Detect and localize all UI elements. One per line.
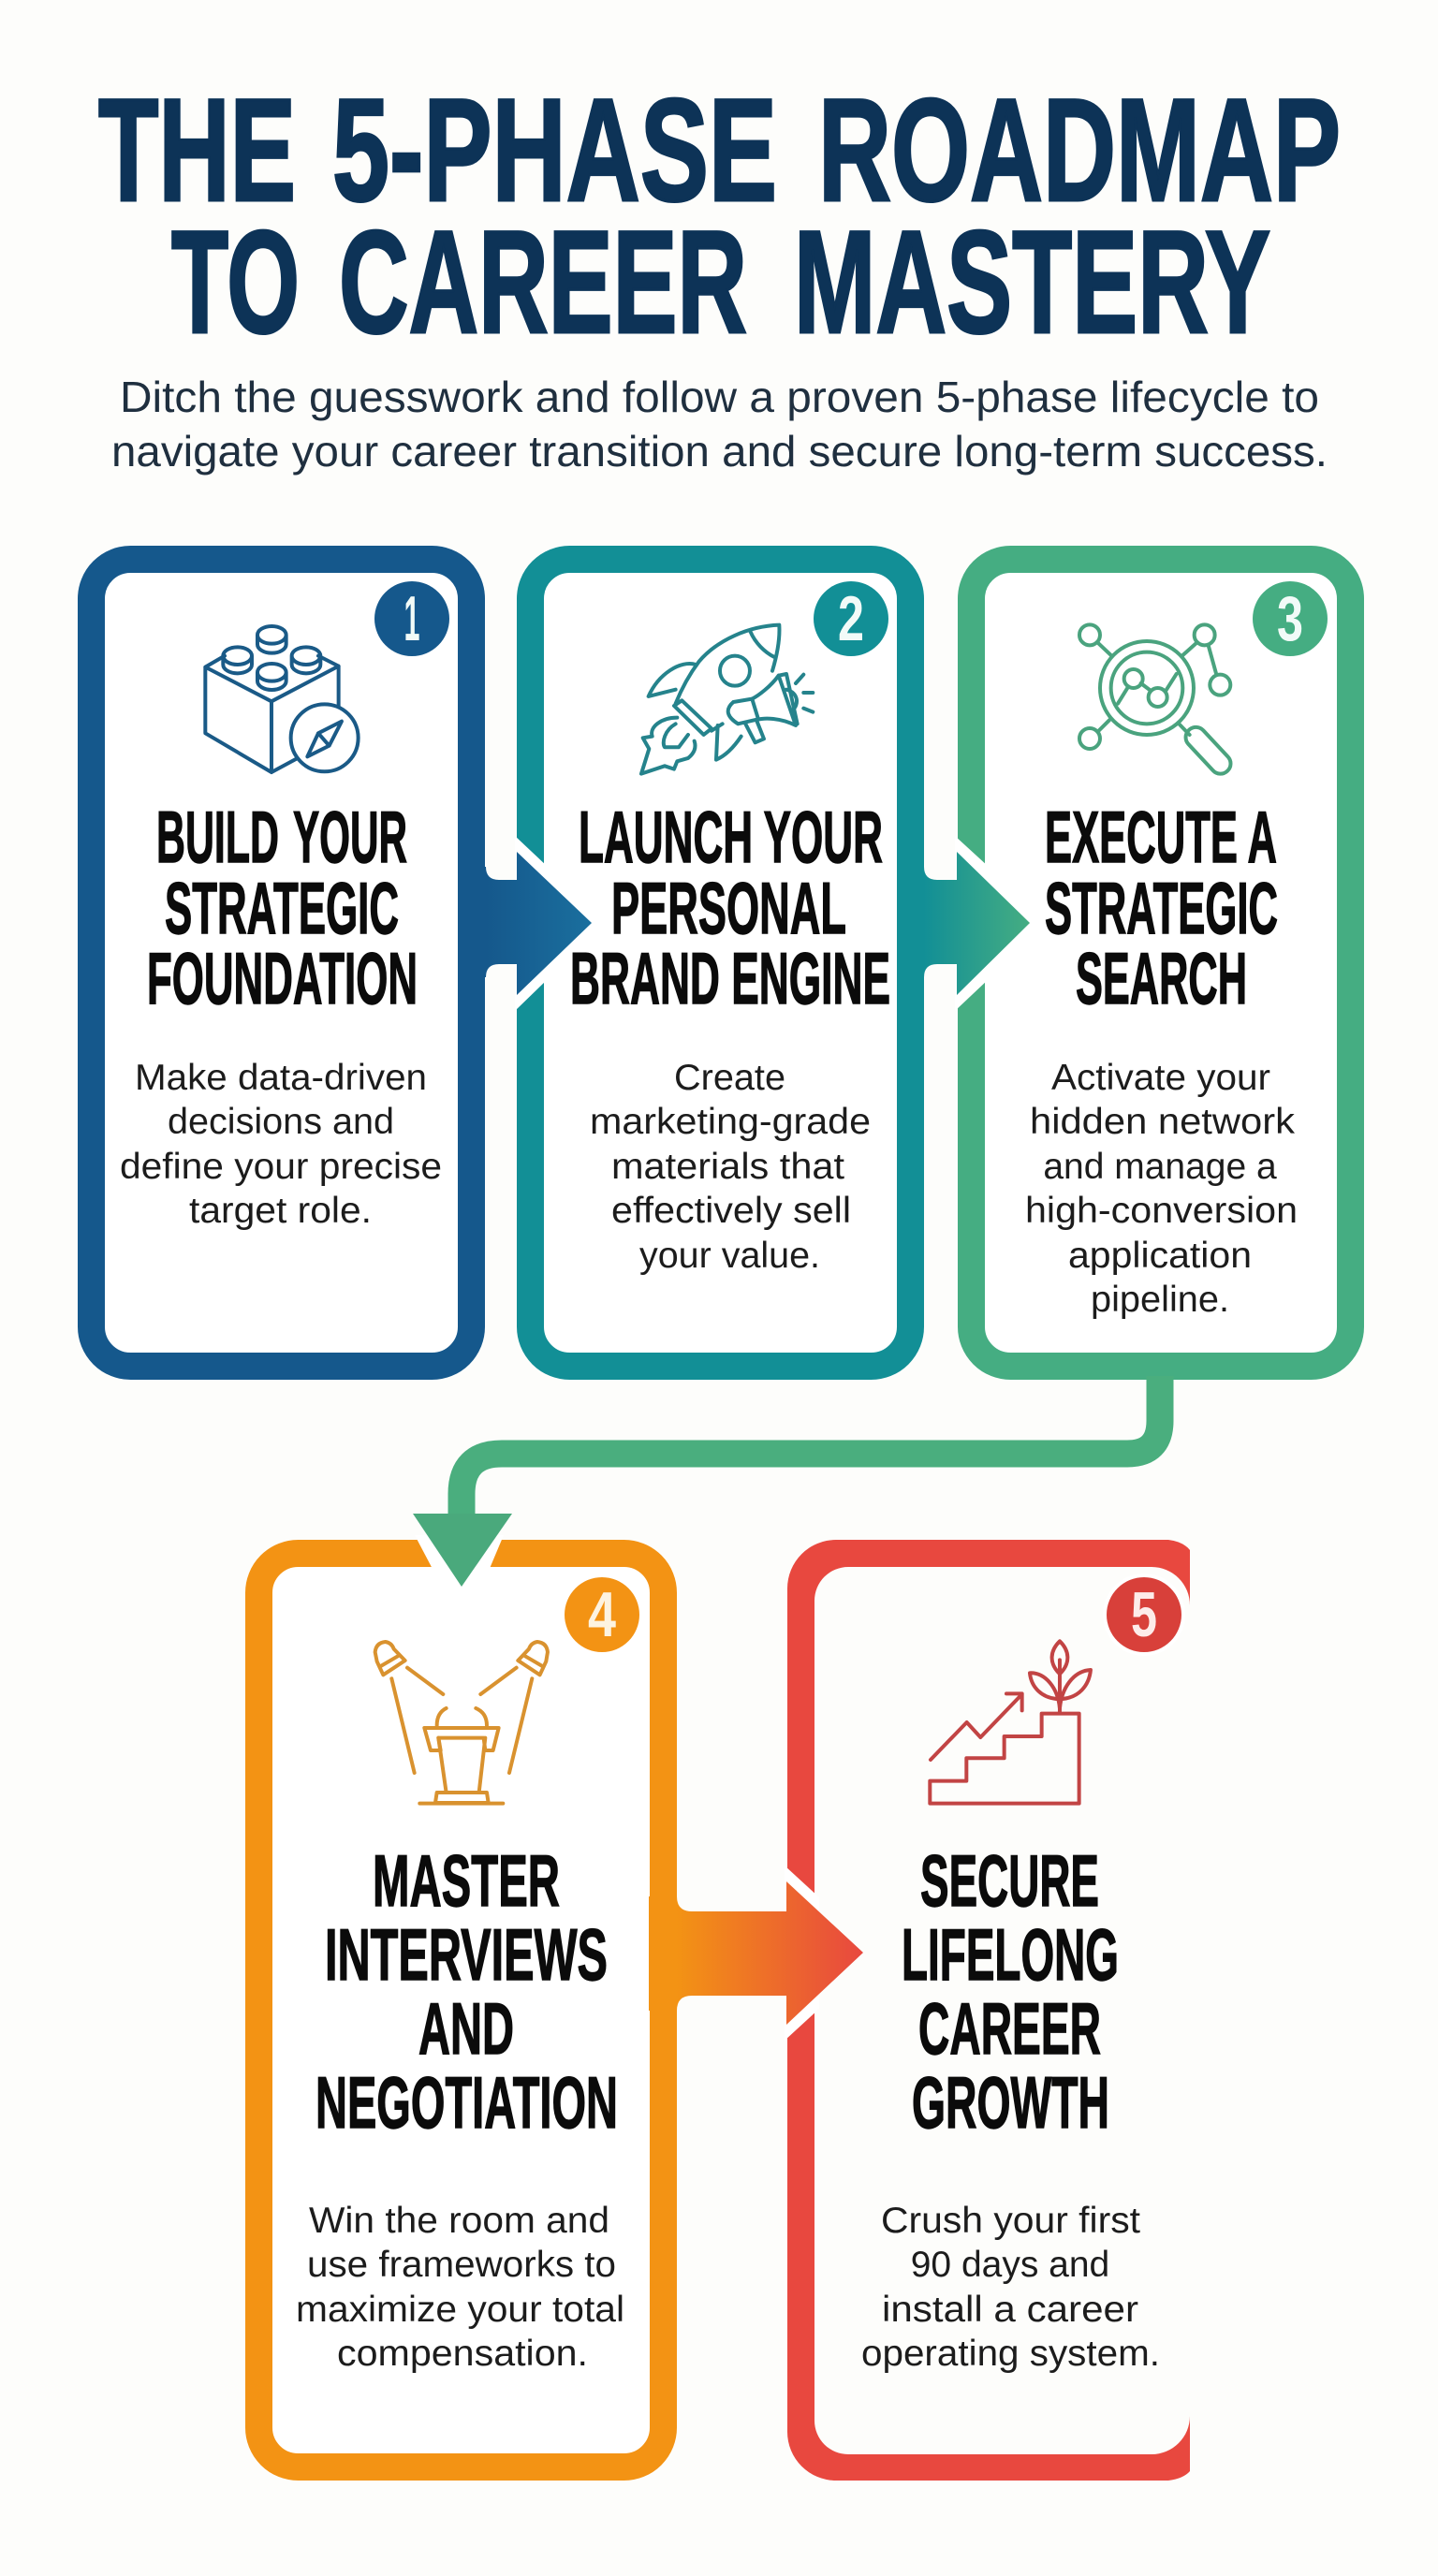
heading: NEGOTIATION	[315, 2061, 618, 2144]
arrow: phase 3 to 4 connector	[413, 1376, 1160, 1587]
description: compensation.	[337, 2334, 588, 2374]
title	[98, 69, 1341, 364]
description	[120, 1058, 442, 1231]
heading: STRATEGIC	[165, 867, 399, 949]
description: effectively sell	[611, 1191, 851, 1231]
heading: YOUR	[293, 796, 407, 878]
description: marketing-grade	[590, 1102, 871, 1142]
description	[296, 2201, 624, 2374]
badge: number 5	[1103, 1573, 1185, 1656]
title: CAREER	[339, 201, 747, 364]
subtitle: Ditch the guesswork and follow a proven 5-phase lifecycle to	[120, 373, 1319, 421]
heading: PERSONAL	[611, 867, 846, 949]
heading: LIFELONG	[902, 1913, 1119, 1996]
heading: SEARCH	[1076, 937, 1247, 1019]
badge: number 1: 1	[404, 583, 419, 654]
heading	[1045, 796, 1278, 1019]
title: THE	[98, 69, 296, 232]
description	[590, 1058, 871, 1276]
description: Win the room and	[309, 2201, 609, 2241]
description: hidden network	[1030, 1102, 1296, 1142]
heading: SECURE	[920, 1839, 1099, 1922]
icon: rocket and megaphone	[641, 625, 813, 774]
icon: spotlights on podium	[375, 1642, 548, 1804]
description: operating system.	[861, 2334, 1160, 2374]
description: and manage a	[1043, 1147, 1277, 1187]
heading: AND	[418, 1987, 514, 2070]
description: application	[1068, 1236, 1252, 1276]
heading: CAREER	[918, 1987, 1101, 2070]
title: TO	[171, 201, 300, 364]
subtitle: navigate your career transition and secure long-term success.	[111, 427, 1328, 476]
description	[861, 2201, 1160, 2374]
description: pipeline.	[1091, 1280, 1229, 1320]
description: Make data-driven	[135, 1058, 427, 1098]
heading: BUILD	[156, 796, 279, 878]
description: decisions and	[168, 1102, 394, 1142]
badge: number 3	[1249, 578, 1331, 660]
badge: number 4	[561, 1573, 643, 1656]
badge: number 2: 2	[838, 583, 864, 654]
panel: phase 3	[972, 560, 1350, 1367]
heading: LAUNCH YOUR	[579, 796, 883, 878]
description	[1025, 1058, 1298, 1320]
heading	[570, 796, 890, 1019]
icon: network magnifier	[1079, 624, 1235, 778]
panel: phase 4	[258, 1554, 663, 2467]
title: 5-PHASE	[332, 69, 777, 232]
description: Crush your first	[881, 2201, 1140, 2241]
icon: stairs and plant	[930, 1641, 1091, 1804]
heading	[902, 1839, 1119, 2144]
heading: INTERVIEWS	[325, 1913, 608, 1996]
description: define your precise	[120, 1147, 442, 1187]
heading: MASTER	[373, 1839, 560, 1922]
description: materials that	[611, 1147, 844, 1187]
heading	[147, 796, 418, 1019]
arrow: phase 2 to 3	[897, 836, 1030, 1011]
description: high-conversion	[1025, 1191, 1298, 1231]
badge: number 4: 4	[588, 1579, 616, 1650]
arrow: phase 1 to 2	[459, 836, 592, 1011]
panel: phase 2	[530, 560, 910, 1367]
description: maximize your total	[296, 2290, 624, 2330]
description: install a career	[882, 2290, 1138, 2330]
icon: building block and compass	[205, 626, 359, 772]
description: 90 days and	[911, 2245, 1109, 2285]
badge: number 2	[810, 578, 892, 660]
description: use frameworks to	[307, 2245, 616, 2285]
badge: number 3: 3	[1277, 583, 1303, 654]
arrow: phase 4 to 5	[649, 1866, 863, 2041]
description: target role.	[189, 1191, 372, 1231]
heading: BRAND ENGINE	[570, 937, 890, 1019]
description: your value.	[639, 1236, 820, 1276]
heading: GROWTH	[912, 2061, 1109, 2144]
panel: phase 5	[787, 1540, 1190, 2481]
description: Activate your	[1051, 1058, 1270, 1098]
badge: number 5: 5	[1131, 1579, 1157, 1650]
heading: FOUNDATION	[147, 937, 418, 1019]
description: Create	[674, 1058, 785, 1098]
badge: number 1	[371, 578, 453, 660]
subtitle	[111, 373, 1328, 476]
heading	[315, 1839, 618, 2144]
panel: phase 1	[92, 560, 472, 1367]
